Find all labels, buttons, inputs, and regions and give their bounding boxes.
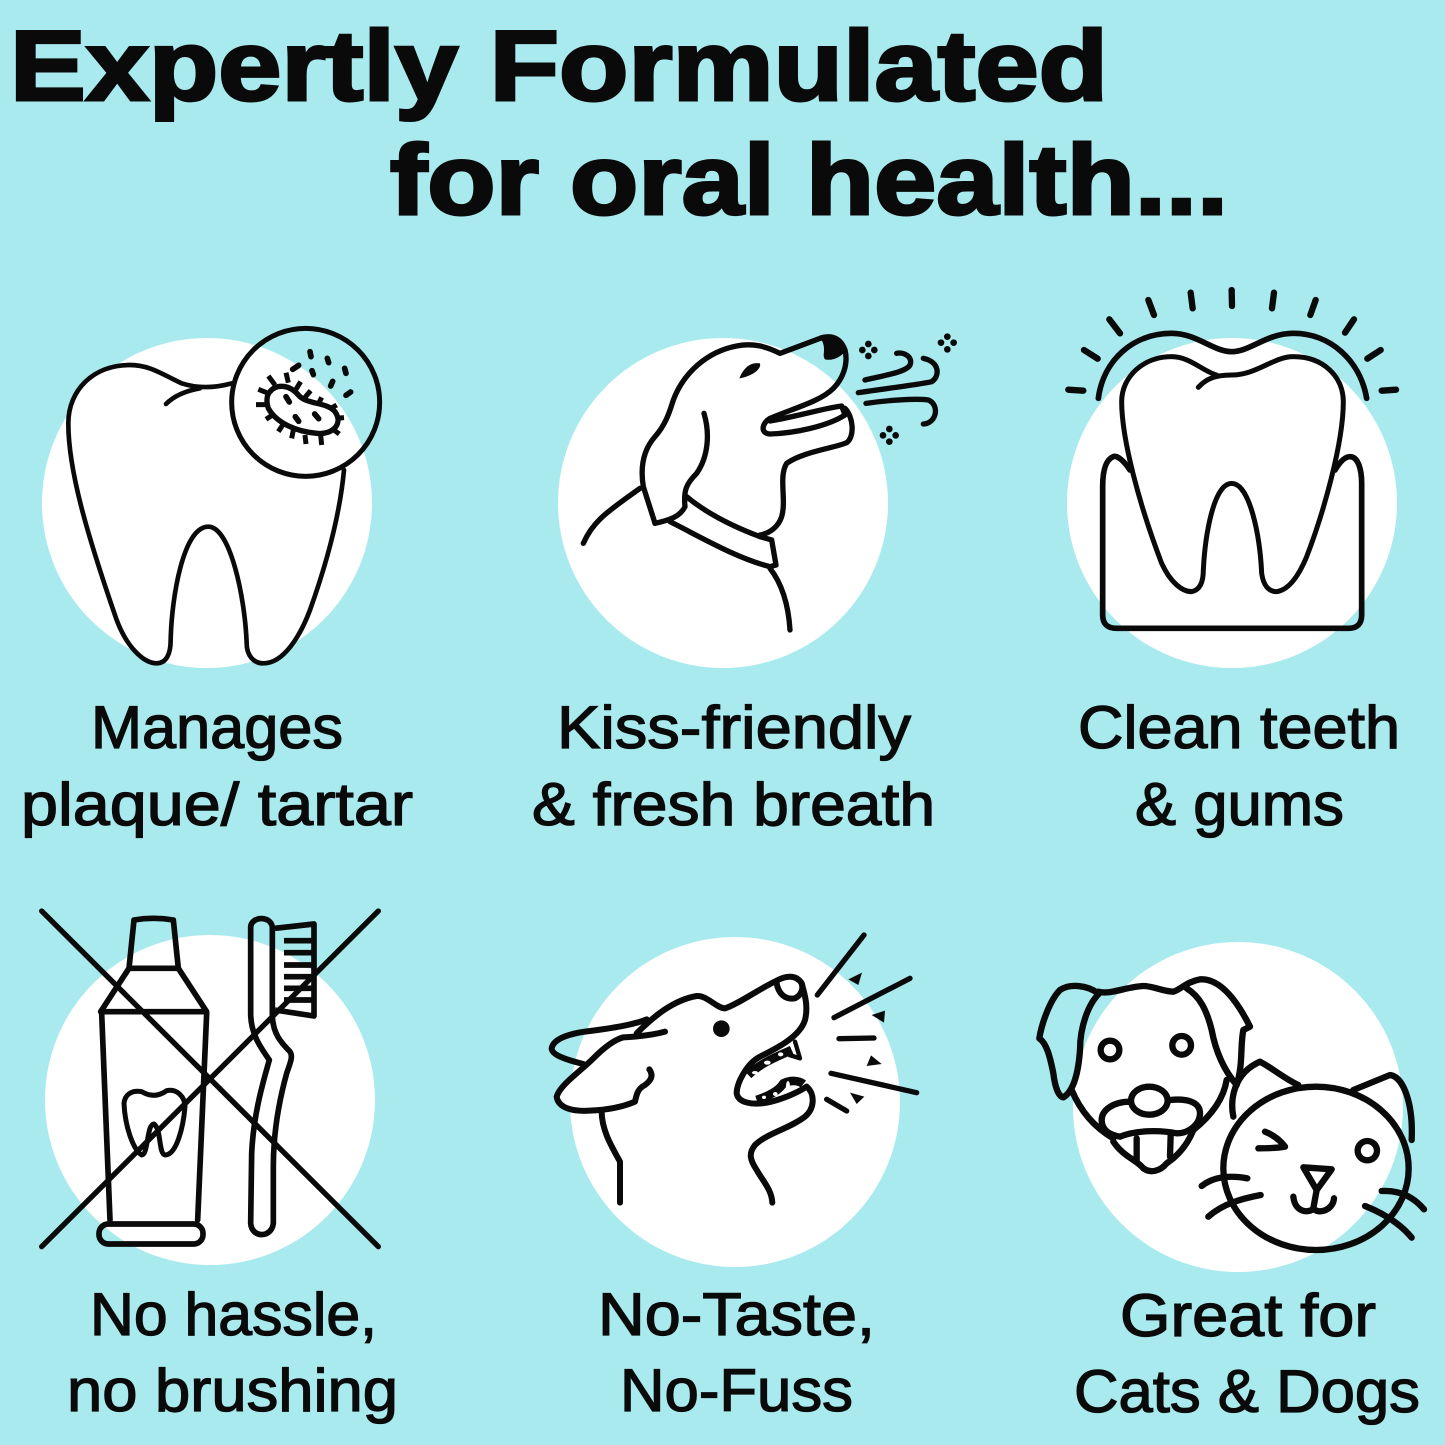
panel: no hassle, no brushing <box>42 911 398 1424</box>
panel: clean teeth and gums <box>1067 290 1400 838</box>
panel: great for cats and dogs <box>1039 942 1424 1425</box>
label <box>1074 1282 1420 1425</box>
panel: manages plaque and tartar <box>21 328 413 838</box>
label <box>598 1281 875 1424</box>
icon: crossed-out toothpaste and toothbrush <box>42 911 378 1247</box>
panel: no-taste, no-fuss <box>552 935 917 1424</box>
label: no brushing <box>67 1357 398 1424</box>
label: Clean teeth <box>1078 694 1400 761</box>
title <box>10 10 1228 235</box>
label: plaque/ tartar <box>21 771 413 838</box>
white circle <box>1073 942 1403 1272</box>
icon: barking dog <box>552 935 917 1203</box>
label: Great for <box>1120 1282 1376 1349</box>
icon: shining tooth in gum <box>1068 290 1396 628</box>
label: No-Taste, <box>598 1281 875 1348</box>
white circle <box>45 935 375 1265</box>
icon: tooth with bacteria <box>68 328 380 663</box>
panel: kiss-friendly and fresh breath <box>532 333 957 838</box>
label: No-Fuss <box>620 1357 853 1424</box>
white circle <box>42 338 372 668</box>
label <box>21 694 413 838</box>
label: & gums <box>1135 771 1344 838</box>
label <box>532 694 935 838</box>
label <box>1078 694 1400 838</box>
label: Kiss-friendly <box>557 694 911 761</box>
label: Manages <box>91 694 343 761</box>
title: Expertly Formulated <box>10 10 1108 121</box>
white circle <box>570 937 900 1267</box>
label: No hassle, <box>90 1281 377 1348</box>
icon: dog and cat faces <box>1039 979 1424 1250</box>
label: Cats & Dogs <box>1074 1358 1420 1425</box>
label <box>67 1281 398 1424</box>
title: for oral health... <box>390 124 1228 235</box>
white circle <box>1067 338 1397 668</box>
white circle <box>558 338 888 668</box>
label: & fresh breath <box>532 771 935 838</box>
icon: dog with fresh breath <box>583 333 957 630</box>
